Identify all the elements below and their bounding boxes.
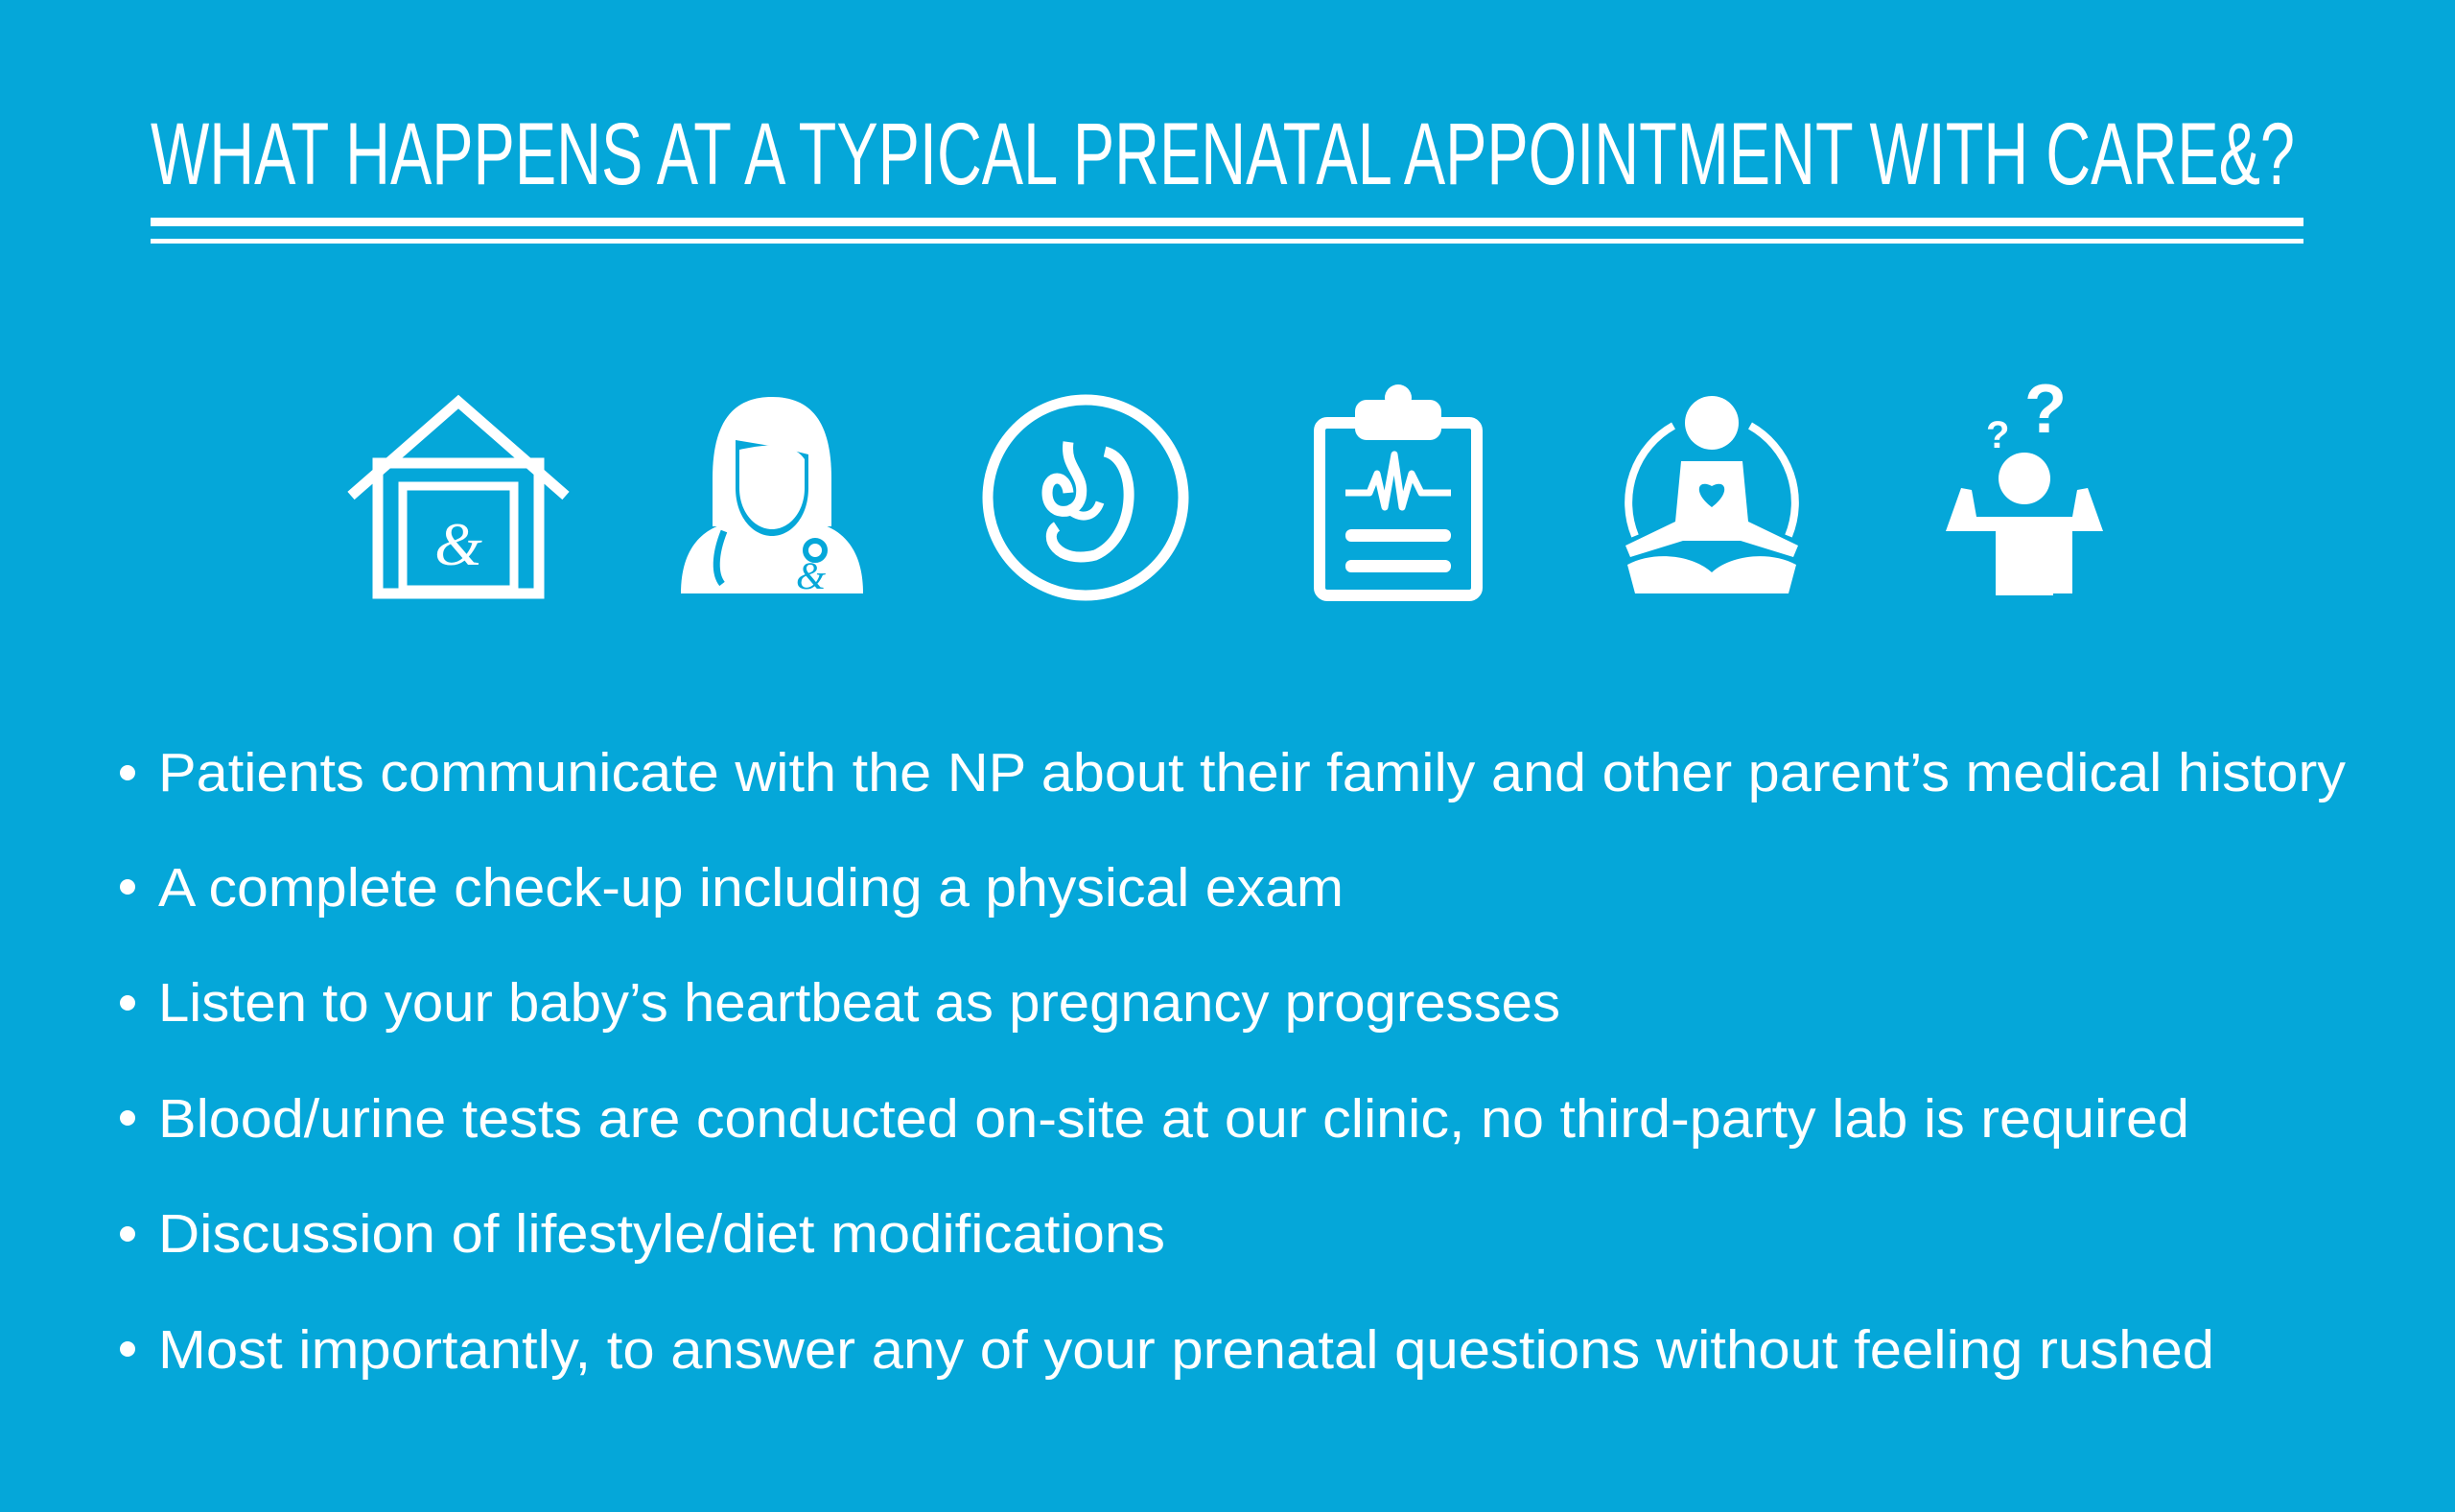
icon: meditation with heart — [1625, 396, 1798, 593]
icon: fetus in circle — [988, 400, 1183, 595]
icon: nurse practitioner: & — [796, 554, 826, 597]
icon: clipboard with heartbeat — [1320, 384, 1477, 595]
bullet 3: Listen to your baby’s heartbeat as pregnancy progresses — [158, 972, 1560, 1034]
bullet 1: Patients communicate with the NP about their family and other parent’s medical history — [158, 742, 2347, 803]
bullet list — [120, 742, 2347, 1381]
bullet 5: Discussion of lifestyle/diet modifications — [158, 1203, 1165, 1265]
bullet 2: A complete check-up including a physical exam — [158, 857, 1344, 919]
icon: person with question marks — [1946, 371, 2103, 595]
icon: house — [351, 402, 566, 593]
icon: person with question marks: ? — [1986, 414, 2009, 456]
icon: person with question marks: ? — [2024, 371, 2067, 448]
icon: nurse practitioner — [681, 397, 863, 597]
bullet 4: Blood/urine tests are conducted on-site at our clinic, no third-party lab is required — [158, 1088, 2189, 1150]
icon: house: & — [434, 510, 482, 578]
bullet 6: Most importantly, to answer any of your prenatal questions without feeling rushed — [158, 1319, 2214, 1381]
